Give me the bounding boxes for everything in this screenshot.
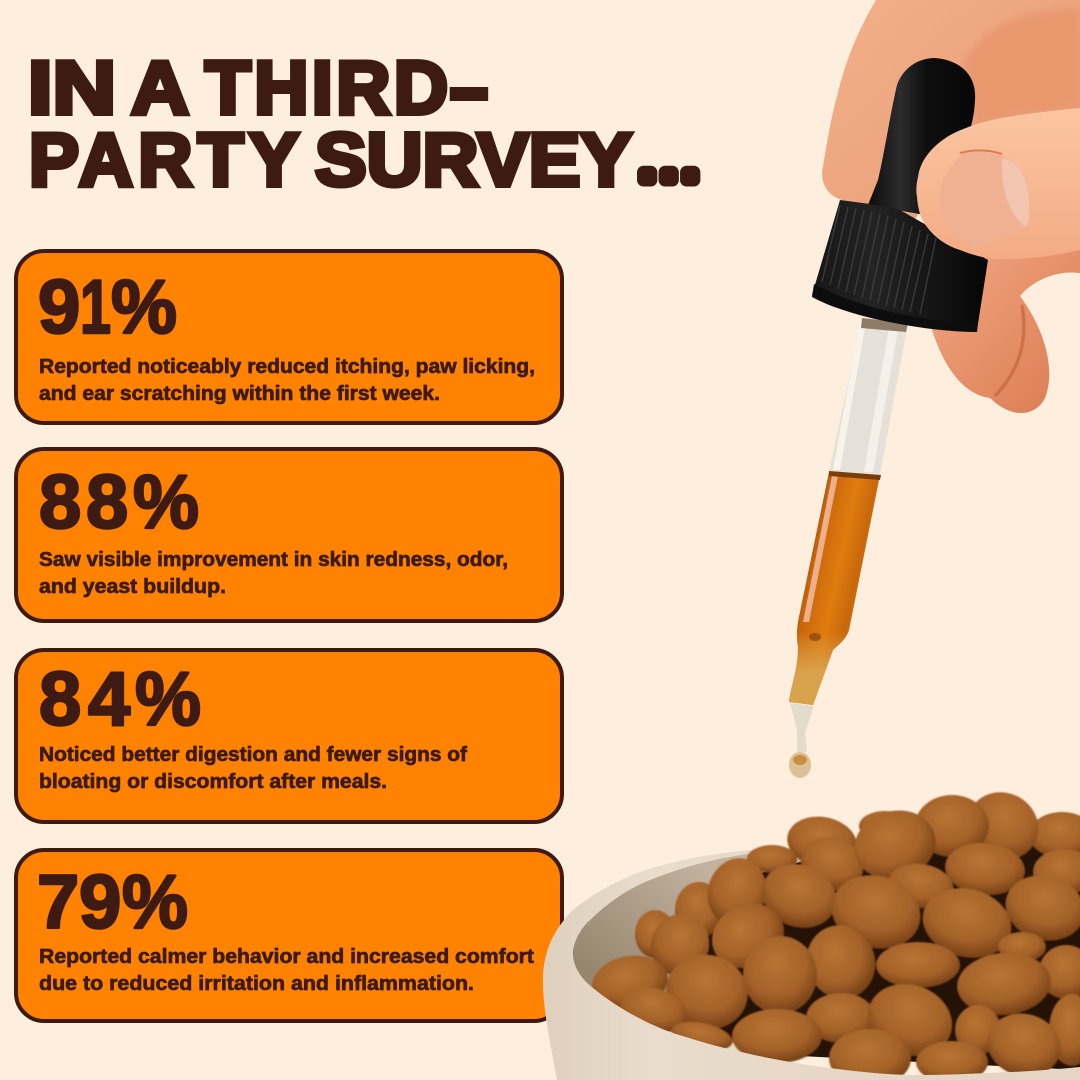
title [28,46,697,202]
stat number: 91%: % [111,265,177,350]
illustration: bowl of kibble [543,779,1080,1080]
stat description: skin: Saw visible improvement in skin redness, odor, [39,549,508,571]
stat number: 91%: 1 [80,265,111,350]
stat number: 79%: 79 [37,860,121,945]
stat number: 88% [39,460,199,545]
bowl interior [573,850,900,1060]
stat description: digestion: bloating or discomfort after meals. [39,771,387,793]
lower fingers [932,250,1080,413]
panel: stat 91% [16,251,562,423]
title: ... [640,134,697,192]
stat number: 79%: % [122,860,188,945]
stat description: skin: and yeast buildup. [39,576,226,598]
stat number: 84% [39,657,201,742]
panel: stat 88% [16,449,562,621]
stat description: behavior: Reported calmer behavior and increased comfort [39,946,534,968]
stat description: digestion [39,744,467,793]
oil drop [789,703,814,778]
title: PARTY [29,118,299,202]
illustration: hand holding dropper [812,0,1080,413]
black dropper bulb [868,58,975,215]
stat description: itching [39,356,535,405]
stat description: behavior [39,946,534,995]
kibble pieces [588,779,1080,1080]
illustration: amber oil in dropper [789,471,881,778]
stat number: 84%: % [135,657,201,742]
stat description: behavior: due to reduced irritation and inflammation. [39,973,474,995]
title: A [131,46,189,130]
title: - [449,46,489,130]
black knurled cap [812,200,988,332]
stat description: skin [39,549,508,598]
bowl back and rim [543,848,800,1080]
stat number: 88%: % [133,460,199,545]
stat number: 91%: 9 [38,265,80,350]
stat description: itching: and ear scratching within the first week. [39,383,440,405]
illustration: dropper glass tube [829,318,908,474]
title: THIRD [205,46,448,130]
stat number: 91% [38,265,177,350]
thumbnail [940,150,1029,248]
title: SURVEY [315,118,632,202]
back fingers [822,0,1080,240]
stat description: itching: Reported noticeably reduced itching, paw licking, [39,356,535,378]
thumb [916,108,1080,259]
panel: stat 84% [16,650,562,822]
panel: stat 79% [16,850,562,1021]
stat number: 79% [37,860,188,945]
title: IN [28,46,116,130]
stat number: 84%: 84 [39,657,130,742]
stat number: 88%: 88 [39,460,128,545]
bowl front wall [543,940,1080,1080]
stat description: digestion: Noticed better digestion and fewer signs of [39,744,467,766]
